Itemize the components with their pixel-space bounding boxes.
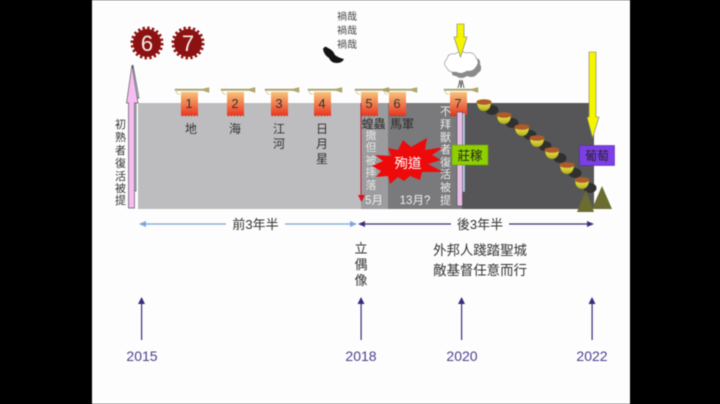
trumpet 5: 5 [365,96,373,111]
panel: timeline periods [138,103,594,209]
icon: cloud [444,52,481,78]
arrow: satan cast down [358,103,365,202]
callout: martyrdom [372,138,444,184]
text: non-worshippers raptured: 復 [440,155,451,169]
white slide background [92,0,630,404]
label: rivers: 河 [273,137,285,151]
year labels: 2018 [345,348,377,364]
trumpet 1 [175,88,209,116]
trumpet 3: 3 [275,96,283,111]
text: abomination set up: 偶 [354,257,368,272]
trumpet 7: 7 [454,96,462,111]
text: non-worshippers raptured: 活 [440,168,451,181]
text: firstfruits raptured: 活 [115,170,126,183]
trumpet 4 [308,88,342,116]
text: 13 months: 13月? [400,195,430,207]
text: satan cast down: 撒 [366,128,376,142]
label: cavalry: 馬軍 [390,117,414,131]
year labels: 2015 [126,348,158,364]
text: non-worshippers raptured: 拜 [440,118,451,131]
year marker arrows [138,297,596,340]
text: non-worshippers raptured: 被 [440,181,451,194]
bowls of wrath [476,99,596,193]
text: satan cast down: 摔 [366,165,376,179]
label: sun moon stars: 星 [316,152,328,166]
trumpet 2 [221,88,255,116]
text: non-worshippers raptured: 獸 [440,131,451,144]
text: satan cast down: 落 [366,179,376,192]
text: firstfruits raptured: 熟 [115,130,126,144]
trumpet 3 [265,88,299,116]
text: last three and a half years: 後3年半 [457,217,503,232]
text: woe woe woe: 禍哉 [337,38,357,51]
text: abomination set up: 像 [354,273,368,288]
arrow: yellow arrow to grapes [587,52,599,138]
arrow: harvest rapture [457,80,465,206]
text: gentiles trample, antichrist rampant: 敵基督任意而行 [433,262,527,278]
text: 5 months: 5月 [365,195,383,207]
trumpet 6: 6 [393,96,401,111]
text: satan cast down: 但 [366,141,376,154]
icon: mountains [577,186,612,212]
badge: seal 6: 6 [141,31,153,56]
label: sun moon stars: 月 [316,137,328,151]
trumpet 2: 2 [231,96,239,111]
label: sea: 海 [229,121,241,136]
text: non-worshippers raptured: 不 [440,106,451,118]
arrow: first half span [139,221,357,227]
label: locusts: 蝗蟲 [361,117,386,131]
trumpet 1: 1 [185,96,193,111]
callout: martyrdom: 殉道 [394,156,422,171]
trumpet 4: 4 [318,96,326,111]
text: first three and a half years: 前3年半 [232,217,279,232]
text: firstfruits raptured: 復 [115,156,126,170]
trumpet 6 [383,88,417,116]
icon: eagle [323,47,344,63]
year labels: 2022 [576,348,608,364]
arrow: second half span [358,221,594,227]
text: woe woe woe: 禍哉 [337,24,357,37]
text: firstfruits raptured: 者 [115,144,126,157]
text: satan cast down: 被 [366,154,376,167]
label: sun moon stars: 日 [316,122,328,136]
label: grapes: 葡萄 [585,149,609,163]
text: abomination set up: 立 [354,241,368,256]
label: grapes [580,146,614,166]
text: gentiles trample, antichrist rampant: 外邦人踐踏聖城 [433,242,527,258]
text: firstfruits raptured: 初 [115,117,126,131]
arrow: yellow arrow to cloud [454,24,467,57]
badge: seal 6 [132,28,162,58]
year labels [126,348,608,364]
trumpet 7 [444,88,478,116]
year labels: 2020 [446,348,478,364]
text: non-worshippers raptured: 提 [440,194,451,207]
label: crops [452,145,488,165]
trumpet 5 [355,88,389,116]
text: firstfruits raptured: 被 [115,182,126,195]
text: non-worshippers raptured: 者 [440,143,451,156]
text: woe woe woe: 禍哉 [337,10,357,23]
badge: seal 7: 7 [182,31,194,56]
label: rivers: 江 [273,122,285,136]
label: earth: 地 [185,122,197,136]
text: firstfruits raptured: 提 [115,194,126,207]
badge: seal 7 [173,28,203,58]
label: crops: 莊稼 [457,148,483,163]
arrow: firstfruits rapture [126,65,139,208]
